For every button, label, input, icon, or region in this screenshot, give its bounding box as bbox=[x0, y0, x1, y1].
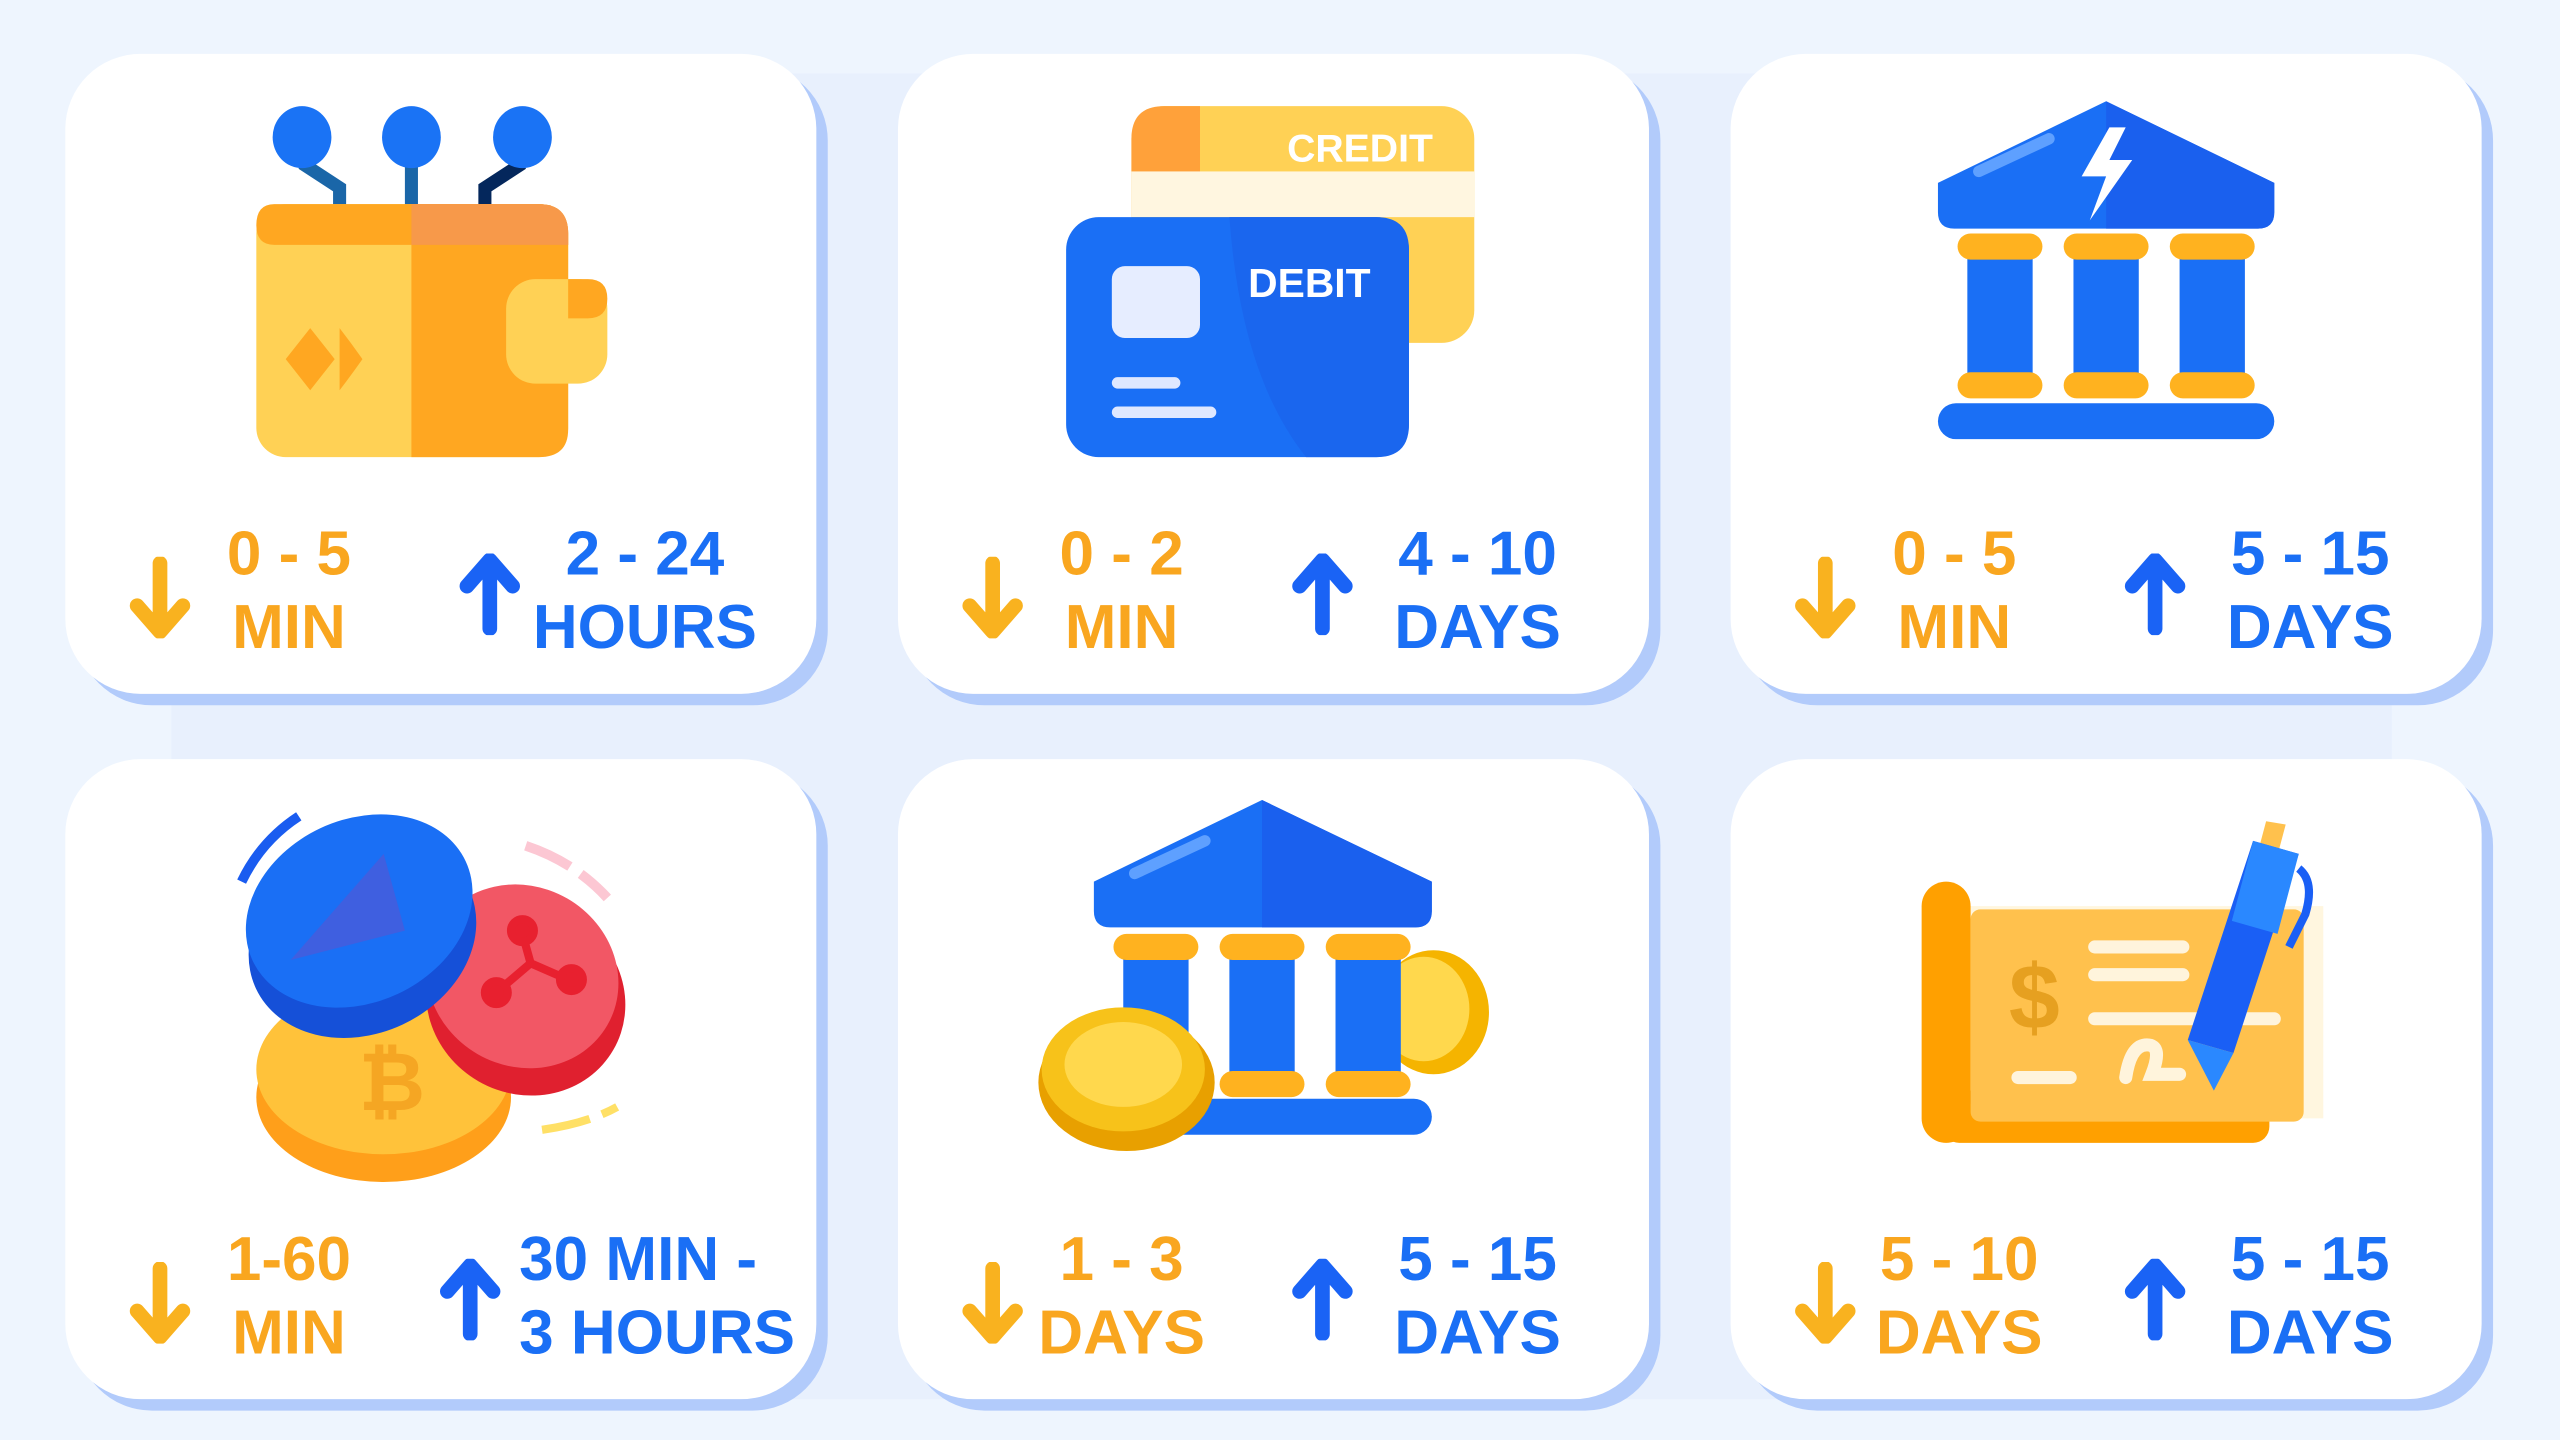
card: cheque: 5 - 10 bbox=[1880, 1226, 2038, 1295]
card: bank transfer: 5 - 15 bbox=[1398, 1226, 1557, 1295]
card: digital wallet: 2 - 24 bbox=[566, 521, 724, 589]
stat: min bbox=[1795, 521, 2016, 663]
card: credit/debit: 0 - 2 bbox=[1060, 521, 1184, 589]
card: cheque: 5 - 15 bbox=[2231, 1226, 2390, 1295]
card: instant bank bbox=[1731, 54, 2482, 694]
card: crypto: 30 MIN - bbox=[519, 1226, 757, 1295]
stat: max bbox=[440, 1226, 795, 1368]
card: credit/debit: 4 - 10 bbox=[1398, 521, 1557, 589]
card: cheque: DAYS bbox=[2227, 1300, 2394, 1368]
stat: max bbox=[1292, 521, 1561, 663]
stat: min bbox=[130, 521, 351, 663]
card: bank transfer bbox=[898, 759, 1649, 1399]
card: crypto: 3 HOURS bbox=[519, 1300, 795, 1368]
card: crypto: 1-60 bbox=[227, 1226, 351, 1295]
card: digital wallet: HOURS bbox=[533, 594, 757, 663]
card: bank transfer: DAYS bbox=[1394, 1300, 1561, 1368]
card: digital wallet: 0 - 5 bbox=[227, 521, 351, 589]
stat: max bbox=[460, 521, 757, 663]
card: credit/debit: DAYS bbox=[1394, 594, 1561, 663]
card: credit/debit bbox=[898, 54, 1649, 694]
icon: wallet bbox=[256, 106, 608, 458]
icon: cheque and pen bbox=[1922, 821, 2324, 1143]
stat: max bbox=[2124, 521, 2394, 663]
icon: cheque and pen: $ bbox=[2009, 947, 2060, 1049]
stat: min bbox=[962, 521, 1184, 663]
stat: max bbox=[2124, 1226, 2394, 1368]
card: digital wallet bbox=[65, 54, 816, 694]
stat: min bbox=[962, 1226, 1205, 1368]
card: cheque: DAYS bbox=[1876, 1300, 2043, 1368]
card: crypto: MIN bbox=[232, 1300, 346, 1368]
icon: cards: DEBIT bbox=[1248, 260, 1371, 306]
card: credit/debit: MIN bbox=[1065, 594, 1178, 663]
card: bank transfer: DAYS bbox=[1038, 1300, 1205, 1368]
icon: crypto coins: ₿ bbox=[359, 1037, 425, 1128]
card: cheque bbox=[1731, 759, 2482, 1399]
card: crypto bbox=[65, 759, 816, 1399]
card: instant bank: 0 - 5 bbox=[1892, 521, 2016, 589]
icon: cards bbox=[1066, 106, 1474, 458]
card: bank transfer: 1 - 3 bbox=[1060, 1226, 1184, 1295]
icon: bank with lightning bbox=[1938, 101, 2274, 440]
card: instant bank: DAYS bbox=[2227, 594, 2394, 663]
card: instant bank: MIN bbox=[1897, 594, 2011, 663]
stat: min bbox=[1795, 1226, 2043, 1368]
icon: cards: CREDIT bbox=[1287, 128, 1433, 171]
card: instant bank: 5 - 15 bbox=[2231, 521, 2390, 589]
stat: max bbox=[1292, 1226, 1561, 1368]
card: digital wallet: MIN bbox=[232, 594, 346, 663]
icon: bank with coins bbox=[1038, 800, 1489, 1151]
stat: min bbox=[130, 1226, 351, 1368]
icon: crypto coins bbox=[237, 812, 626, 1182]
